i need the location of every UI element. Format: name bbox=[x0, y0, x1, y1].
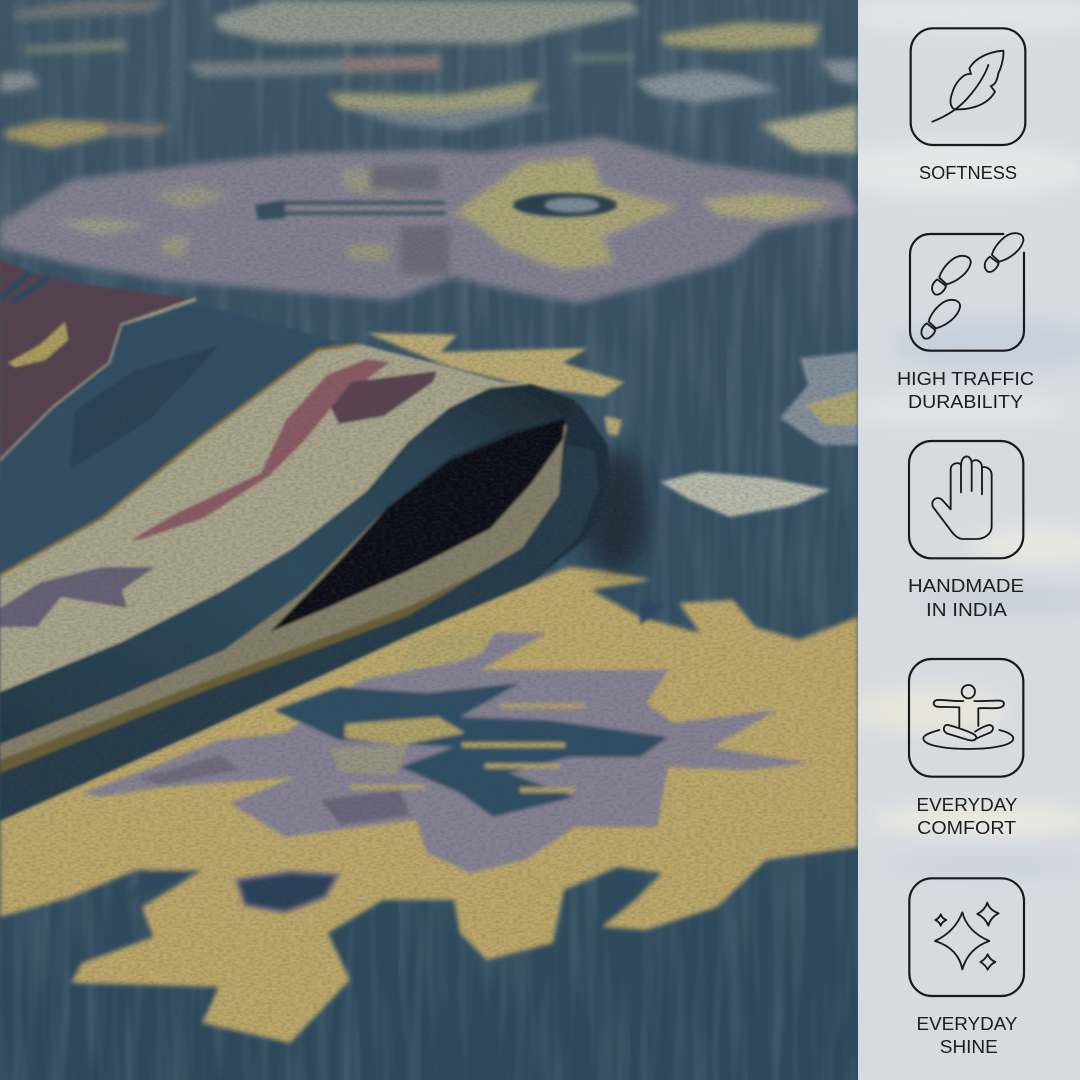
fold: upper binding strip bbox=[0, 384, 575, 744]
rug weave texture bbox=[0, 0, 858, 1080]
fold: inner underside beige bbox=[0, 425, 567, 773]
label: high traffic durability: HIGH TRAFFIC bbox=[897, 369, 1034, 389]
panel background bbox=[858, 0, 1080, 1080]
label: softness: SOFTNESS bbox=[919, 163, 1017, 183]
top motif: central medallion bbox=[255, 193, 617, 222]
fold: blue band bbox=[0, 303, 339, 575]
feature: everyday comfort bbox=[909, 659, 1023, 838]
fold: beige border bbox=[0, 344, 530, 692]
feature: softness bbox=[911, 28, 1025, 183]
label: high traffic durability: DURABILITY bbox=[908, 392, 1023, 412]
panel: features sidebar bbox=[858, 0, 1080, 1080]
rug pile streaks bbox=[0, 0, 858, 1080]
fold: outer binding bbox=[378, 402, 610, 580]
fold: lilac ornament bbox=[0, 567, 155, 627]
fold: pale medallion outline bbox=[0, 299, 196, 461]
label: handmade in india bbox=[908, 576, 1024, 620]
label: high traffic durability bbox=[897, 369, 1034, 412]
middle rug motifs bbox=[367, 333, 858, 517]
label: everyday comfort bbox=[916, 795, 1018, 838]
fold: purple scroll bbox=[331, 371, 437, 424]
icon: hand bbox=[909, 441, 1023, 558]
label: everyday shine bbox=[916, 1014, 1018, 1057]
top rug motifs bbox=[0, 0, 858, 303]
feature: everyday shine bbox=[909, 878, 1024, 1057]
rug field bbox=[0, 0, 858, 388]
icon: feather bbox=[911, 28, 1025, 145]
label: everyday comfort: EVERYDAY bbox=[916, 795, 1018, 815]
feature: high traffic durability bbox=[897, 233, 1034, 412]
fold: pink scroll bbox=[131, 359, 390, 540]
fold: lower binding strip bbox=[0, 445, 598, 820]
icon: footprints bbox=[910, 233, 1024, 351]
feature: handmade in india bbox=[908, 441, 1024, 620]
icon: meditating figure bbox=[909, 659, 1023, 777]
photo: folded rug close-up bbox=[0, 0, 858, 1080]
fold: burgundy corner bbox=[0, 259, 196, 461]
label: everyday shine: SHINE bbox=[940, 1037, 998, 1057]
label: everyday shine: EVERYDAY bbox=[916, 1014, 1018, 1034]
label: handmade in india: HANDMADE bbox=[908, 576, 1024, 596]
icon: sparkles bbox=[909, 878, 1024, 996]
folded rug bbox=[0, 259, 610, 820]
lower yellow motif bbox=[0, 567, 858, 1043]
fold: inner shadow cavity bbox=[270, 418, 565, 632]
small blue island bbox=[237, 872, 338, 912]
label: handmade in india: IN INDIA bbox=[926, 600, 1007, 620]
fold: yellow accent bbox=[8, 322, 68, 367]
label: everyday comfort: COMFORT bbox=[917, 818, 1016, 838]
shadow cast by fold bbox=[581, 448, 649, 572]
lower motif: lilac, blue and yellow flower bbox=[82, 600, 810, 873]
